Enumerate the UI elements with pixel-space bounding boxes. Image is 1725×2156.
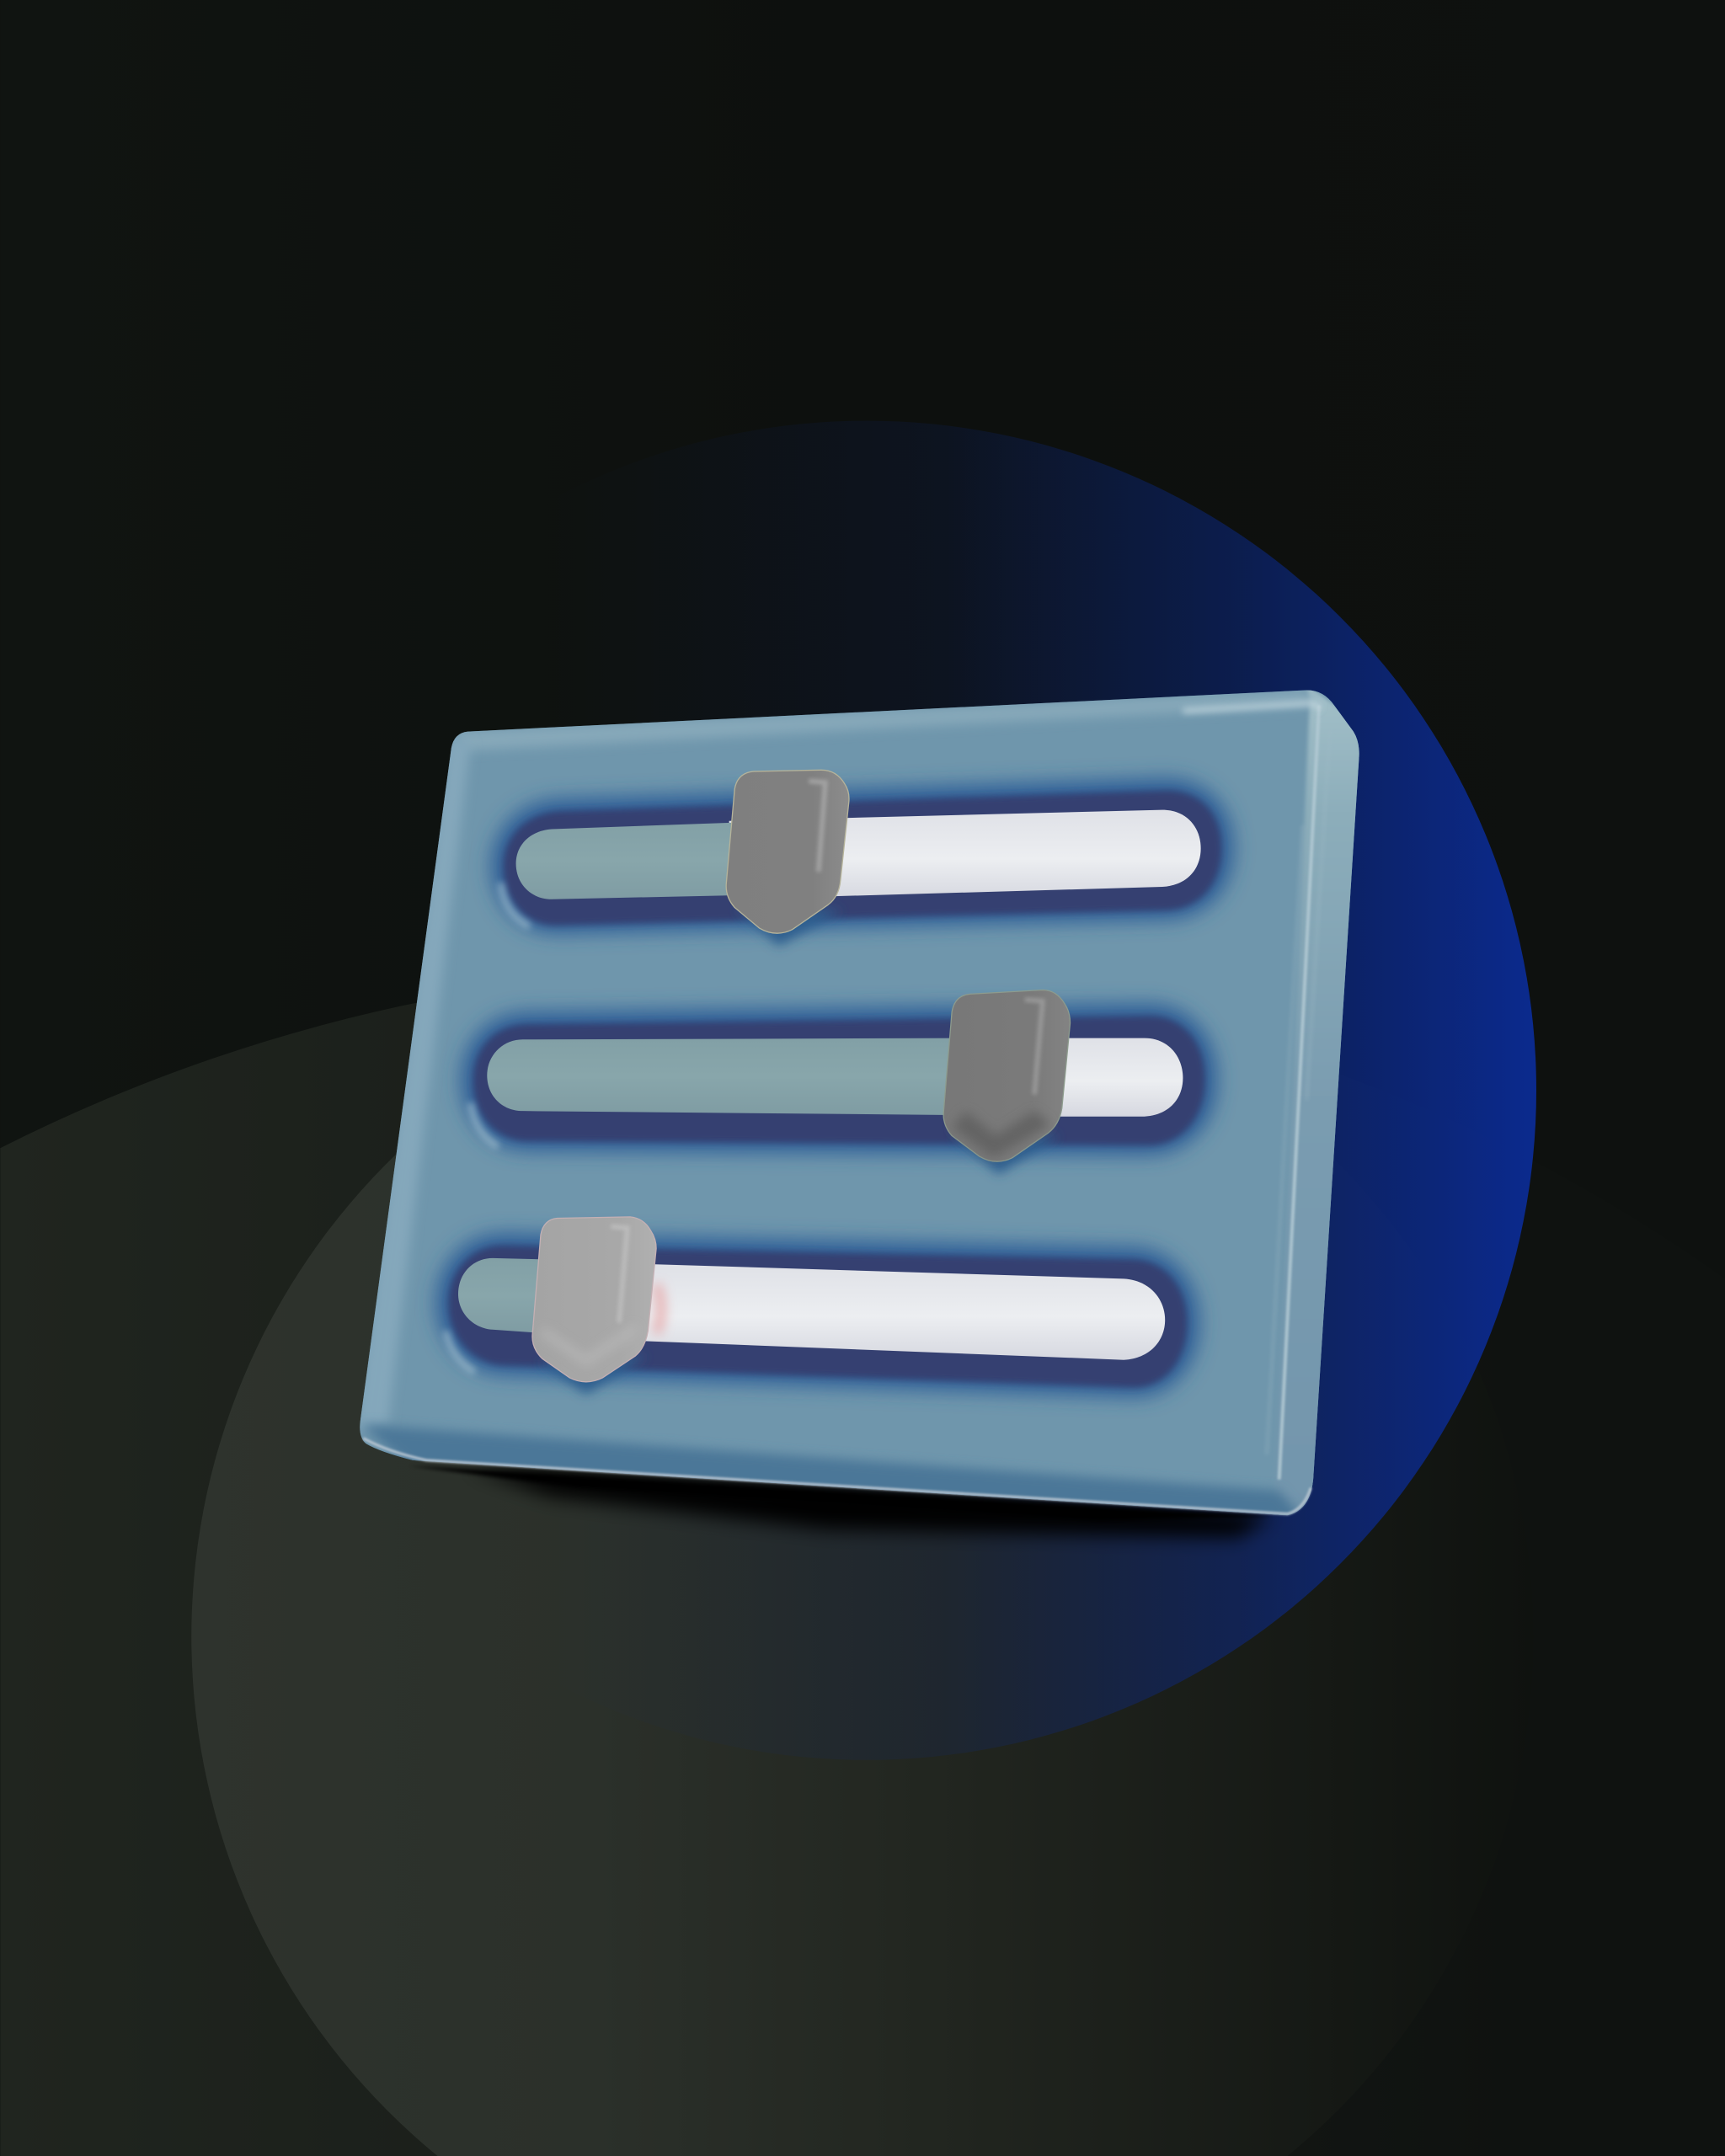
blue circle [197,421,1536,1760]
white track [633,1263,1165,1360]
panel shadow [409,1465,1273,1537]
secondary right highlights [1267,728,1330,1454]
white track [729,810,1201,899]
bottom dark band [360,1424,1310,1526]
knob highlight [611,1226,628,1323]
knob 2 [943,990,1071,1161]
knob lower facet [542,1328,636,1361]
knob shadow [952,1134,1059,1174]
main right highlight [1279,706,1319,1480]
left bevel [355,735,471,1430]
teal track [487,1038,963,1115]
knob lower shade [952,1111,1051,1158]
corner highlight [1183,703,1319,711]
top bevel [454,691,1317,750]
white track [1045,1038,1183,1117]
slot [504,791,1221,926]
slot glow [467,1011,1210,1148]
slider row 1 [498,770,1227,946]
slider panel [355,685,1369,1526]
bottom edge highlight [363,1438,1311,1514]
slider row 3 [443,1217,1193,1395]
teal track [458,1258,550,1334]
slot glow [443,1241,1193,1390]
knob highlight [1025,1000,1043,1095]
knob 3 [532,1217,656,1382]
rim highlight [501,883,530,926]
right side band [1279,691,1359,1515]
slot [449,1246,1187,1387]
knob shadow [736,908,842,946]
knob shadow [539,1356,647,1395]
rim highlight [446,1331,475,1372]
slot [473,1017,1205,1145]
teal track [516,822,743,899]
background disc [191,966,1534,2156]
knob highlight [809,781,825,872]
rim highlight [471,1102,498,1147]
illustration: 3D slider panel on dark background [0,421,1536,2156]
slot glow [498,785,1227,926]
knob 1 [726,770,849,933]
panel body [360,690,1359,1515]
slider row 2 [467,990,1210,1174]
warm glint on track [656,1284,661,1334]
background hill [0,969,1725,2156]
